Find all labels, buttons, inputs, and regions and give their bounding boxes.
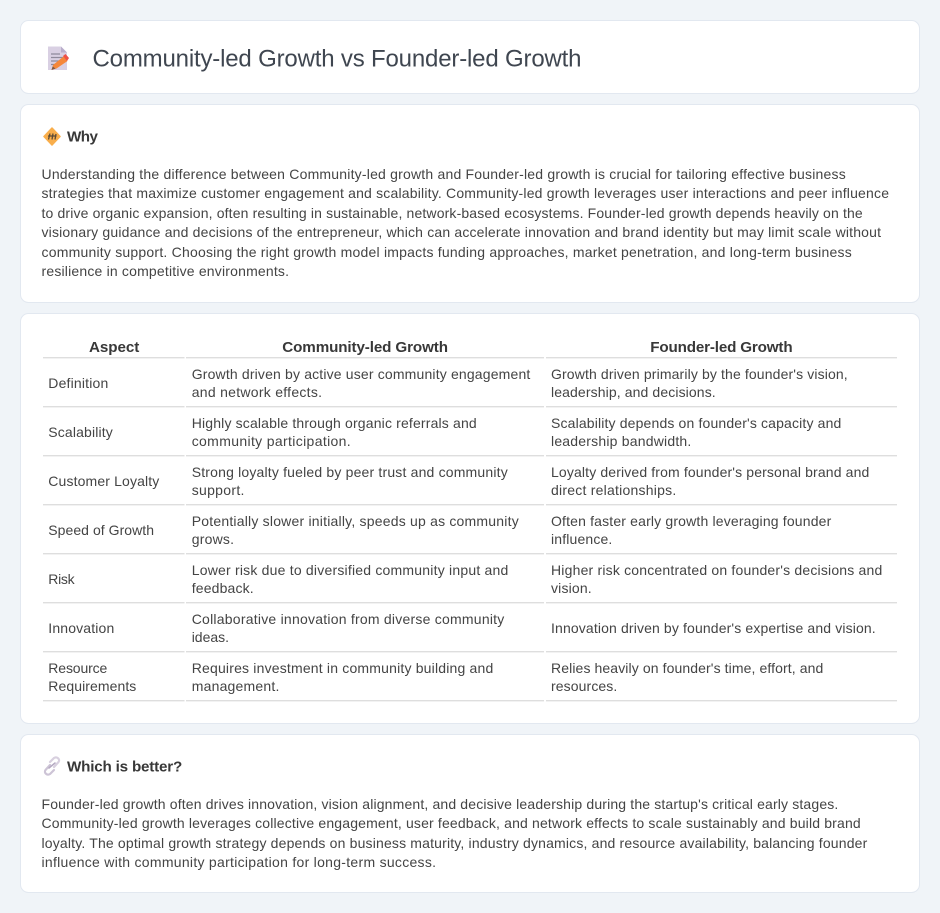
row: speed of growth: Potentially slower initially, speeds up as community xyxy=(192,513,519,529)
text block: which is better paragraph xyxy=(42,796,868,870)
panel: why xyxy=(20,104,920,302)
row: speed of growth xyxy=(48,513,832,547)
heading: which is better: Which is better? xyxy=(67,759,182,776)
row: resource requirements: Requires investment in community building and xyxy=(192,660,493,676)
row: risk: vision. xyxy=(551,580,592,596)
row: definition: Definition xyxy=(48,375,108,391)
row: scalability xyxy=(48,415,841,449)
row: customer loyalty: direct relationships. xyxy=(551,482,676,498)
table header row: Founder-led Growth xyxy=(650,339,793,356)
row: innovation: Innovation driven by founder's expertise and vision. xyxy=(551,620,876,636)
row: scalability: Scalability xyxy=(48,424,113,440)
row: scalability: Scalability depends on founder's capacity and xyxy=(551,415,841,431)
row: customer loyalty xyxy=(48,464,869,498)
row: risk: feedback. xyxy=(192,580,254,596)
row: definition: Growth driven primarily by the founder's vision, xyxy=(551,366,848,382)
icon: memo with pencil xyxy=(48,46,69,70)
icon: chain link xyxy=(45,757,59,775)
text block: why paragraph: Understanding the difference between Community-led growth and Founder-led growth is crucial for tailoring effective business xyxy=(42,166,846,182)
row: scalability: community participation. xyxy=(192,433,351,449)
row: innovation: Innovation xyxy=(48,620,114,636)
title: Community-led Growth vs Founder-led Growth xyxy=(92,46,582,72)
row: speed of growth: Speed of Growth xyxy=(48,522,154,538)
heading: why: Why xyxy=(67,128,99,146)
row: innovation: ideas. xyxy=(192,629,229,645)
text block: why paragraph xyxy=(42,166,889,279)
row: resource requirements xyxy=(48,660,823,694)
row: risk xyxy=(48,562,882,596)
text block: why paragraph: to drive organic expansion, often resulting in sustainable, network-based ecosystems. Founder-led growth depends heavily on the xyxy=(42,205,863,221)
table header row: Community-led Growth xyxy=(282,339,448,356)
icon: orange diamond sign xyxy=(44,128,60,145)
row: definition: and network effects. xyxy=(192,384,322,400)
row: scalability: Highly scalable through organic referrals and xyxy=(192,415,477,431)
row: resource requirements: resources. xyxy=(551,678,617,694)
text block: why paragraph: community support. Choosing the right growth model impacts funding approaches, market penetration, and long-term business xyxy=(42,244,852,260)
row: definition: leadership, and decisions. xyxy=(551,384,716,400)
text block: which is better paragraph: Community-led growth leverages collective engagement, user feedback, and network effects to scale sustainably and build brand xyxy=(42,815,861,831)
panel: which is better xyxy=(20,734,920,892)
row: risk: Risk xyxy=(48,571,76,587)
row: resource requirements: management. xyxy=(192,678,279,694)
text block: why paragraph: strategies that maximize customer engagement and scalability. Community-led growth leverages user interactions and peer influence xyxy=(42,185,889,201)
text block: which is better paragraph: Founder-led growth often drives innovation, vision alignment, and decisive leadership during the startup's critical early stages. xyxy=(42,796,838,812)
table header row: Aspect xyxy=(89,339,139,356)
row: innovation xyxy=(48,611,876,645)
row: risk: Lower risk due to diversified community input and xyxy=(192,562,508,578)
row: customer loyalty: Customer Loyalty xyxy=(48,473,159,489)
row: definition xyxy=(48,366,848,400)
row: resource requirements: Resource xyxy=(48,660,108,676)
text block: why paragraph: resilience in competitive environments. xyxy=(42,263,289,279)
panel: title card xyxy=(20,20,920,94)
row: speed of growth: influence. xyxy=(551,531,612,547)
text block: why paragraph: visionary guidance and decisions of the entrepreneur, which can accelerate innovation and brand identity but may limit scale without xyxy=(42,224,881,240)
row: speed of growth: Often faster early growth leveraging founder xyxy=(551,513,832,529)
row: speed of growth: grows. xyxy=(192,531,234,547)
panel: comparison table xyxy=(20,314,920,724)
table header row xyxy=(89,339,793,356)
table row dividers xyxy=(43,357,897,701)
text block: which is better paragraph: influence with community participation for long-term success. xyxy=(42,854,436,870)
row: risk: Higher risk concentrated on founder's decisions and xyxy=(551,562,882,578)
text block: which is better paragraph: loyalty. The optimal growth strategy depends on business maturity, industry dynamics, and resource availability, balancing founder xyxy=(42,835,868,851)
row: resource requirements: Requirements xyxy=(48,678,136,694)
row: customer loyalty: Strong loyalty fueled by peer trust and community xyxy=(192,464,508,480)
row: scalability: leadership bandwidth. xyxy=(551,433,691,449)
row: customer loyalty: Loyalty derived from founder's personal brand and xyxy=(551,464,869,480)
row: customer loyalty: support. xyxy=(192,482,244,498)
row: definition: Growth driven by active user community engagement xyxy=(192,366,530,382)
row: innovation: Collaborative innovation from diverse community xyxy=(192,611,504,627)
row: resource requirements: Relies heavily on founder's time, effort, and xyxy=(551,660,823,676)
